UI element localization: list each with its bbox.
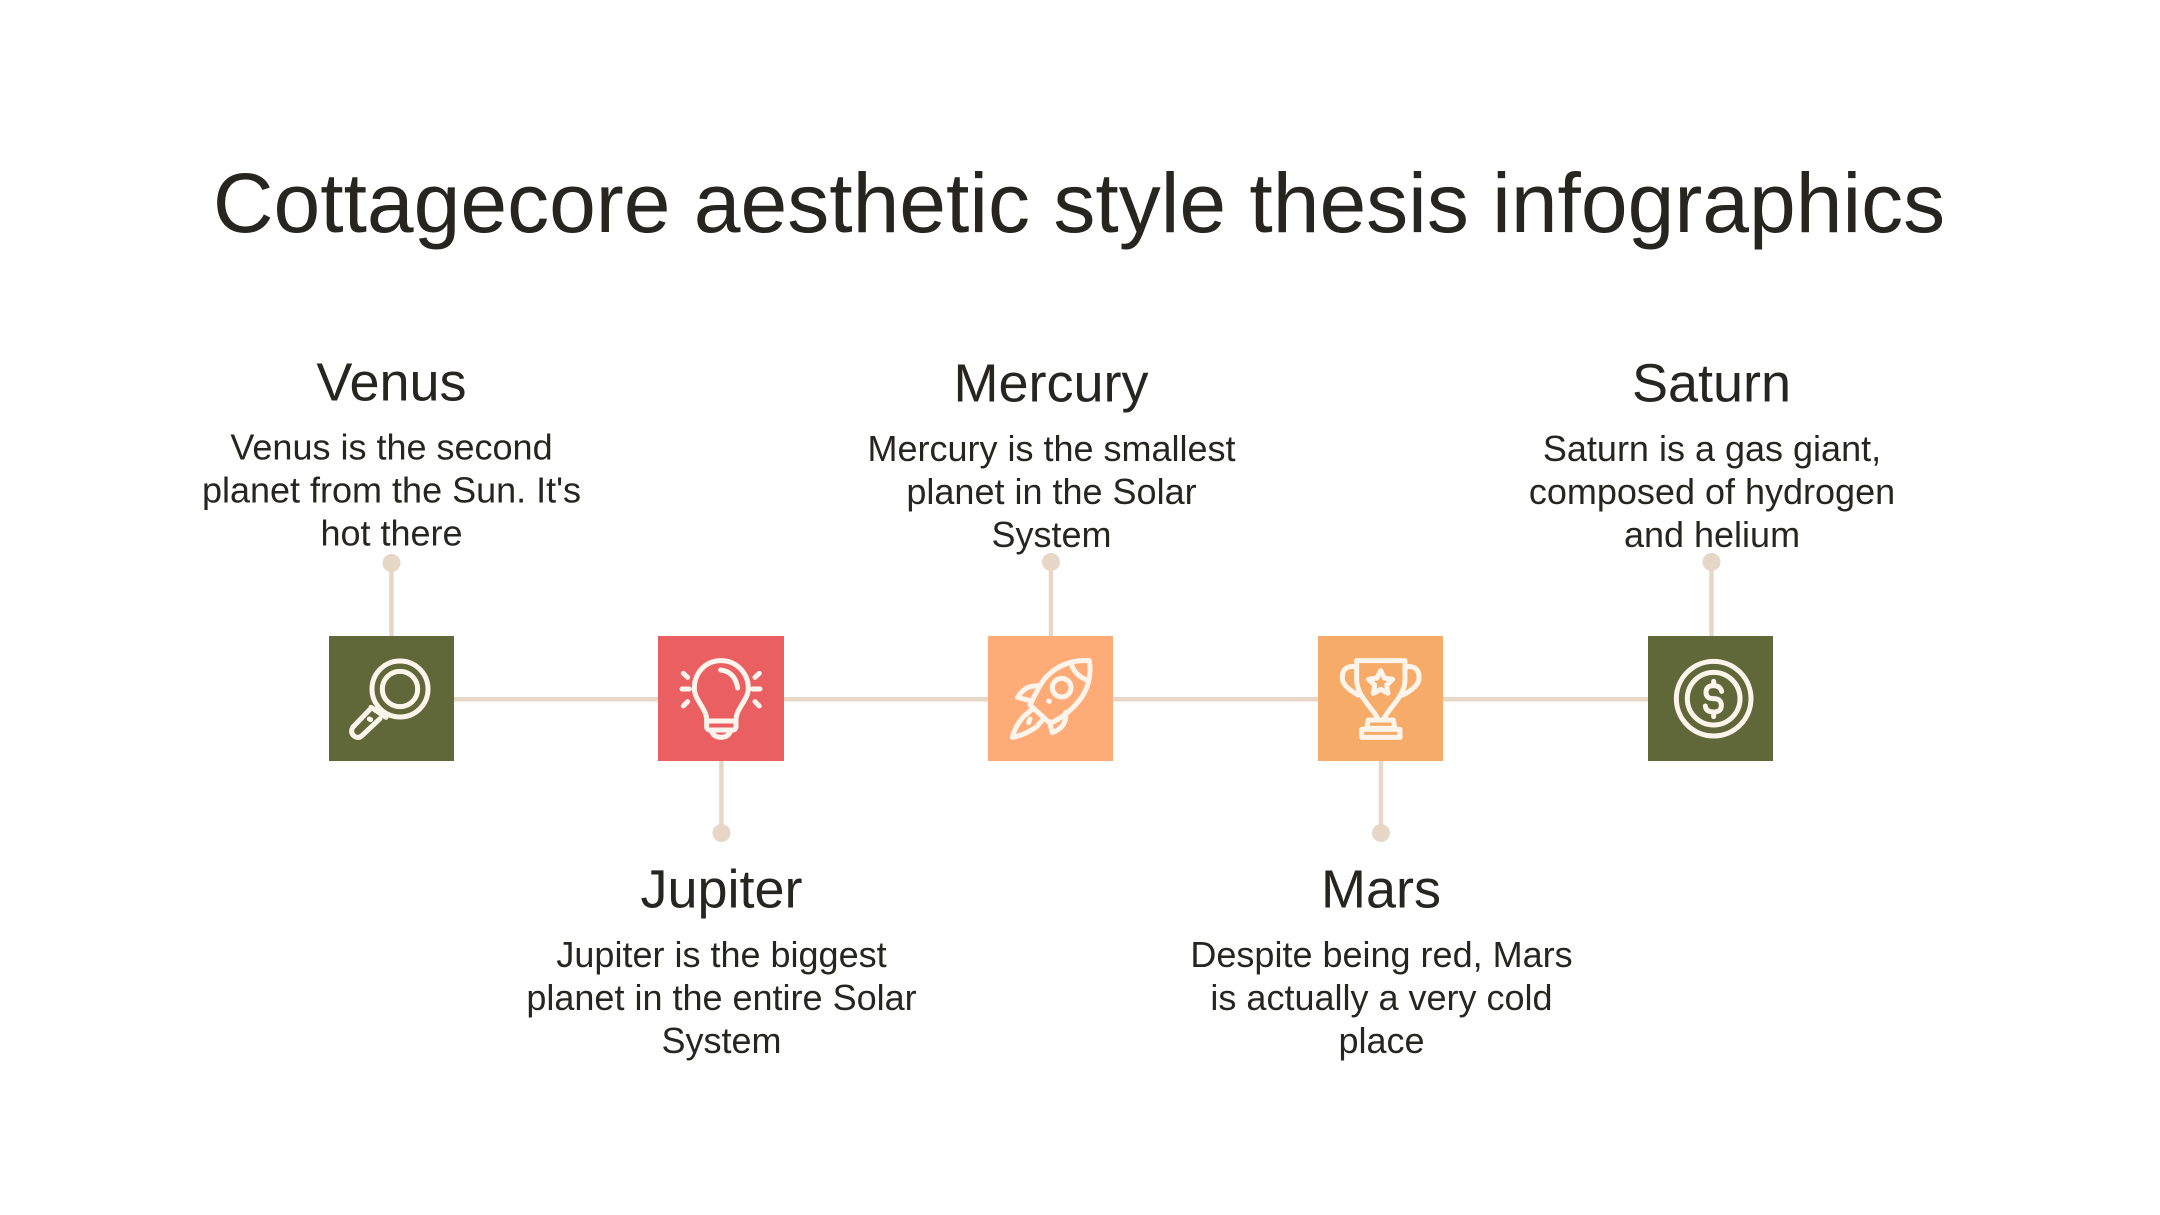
text block: Jupiter description: Jupiter is the biggest: [556, 934, 887, 975]
icon tile: light bulb: [658, 636, 784, 761]
text block: Jupiter description: planet in the entire Solar: [526, 977, 917, 1018]
text block: Mars description: is actually a very cold: [1210, 977, 1553, 1018]
panel: Mars: [1190, 636, 1573, 1061]
connector: Mercury: [1042, 553, 1060, 636]
text block: Mars description: place: [1338, 1020, 1425, 1061]
text block: Jupiter description: System: [661, 1020, 782, 1061]
icon tile: dollar coin: [1648, 636, 1773, 761]
connector: Saturn: [1702, 553, 1720, 636]
text block: Mercury description: planet in the Solar: [906, 471, 1197, 512]
icon tile: rocket: [988, 636, 1113, 761]
heading: Mars: Mars: [1321, 860, 1441, 920]
heading: Jupiter: Jupiter: [640, 860, 803, 920]
connector: Mars: [1372, 761, 1390, 842]
heading: Mercury: Mercury: [953, 354, 1149, 414]
text block: Saturn description: composed of hydrogen: [1529, 471, 1895, 512]
panel: Saturn: [1529, 354, 1895, 761]
panel: Jupiter: [526, 636, 917, 1061]
heading: Venus: Venus: [316, 352, 467, 412]
text block: Saturn description: Saturn is a gas giant,: [1543, 428, 1881, 469]
text block: Mercury description: Mercury is the smallest: [867, 428, 1236, 469]
text block: Venus description: planet from the Sun. It's: [202, 470, 581, 510]
text block: Mars description: Despite being red, Mars: [1190, 934, 1573, 975]
text block: Venus description: Venus is the second: [230, 426, 553, 468]
text block: Mercury description: System: [991, 514, 1112, 555]
icon tile: trophy: [1318, 636, 1443, 761]
icon tile: magnifying glass: [329, 636, 454, 761]
panel: Mercury: [867, 354, 1236, 761]
text block: Venus description: hot there: [320, 512, 463, 554]
title: Cottagecore aesthetic style thesis infographics: [213, 156, 1945, 250]
text block: Saturn description: and helium: [1624, 514, 1800, 555]
connector: Jupiter: [712, 761, 730, 842]
heading: Saturn: Saturn: [1632, 354, 1791, 414]
panel: Venus: [202, 352, 581, 761]
timeline connector line: [454, 697, 1648, 702]
connector: Venus: [382, 554, 400, 636]
